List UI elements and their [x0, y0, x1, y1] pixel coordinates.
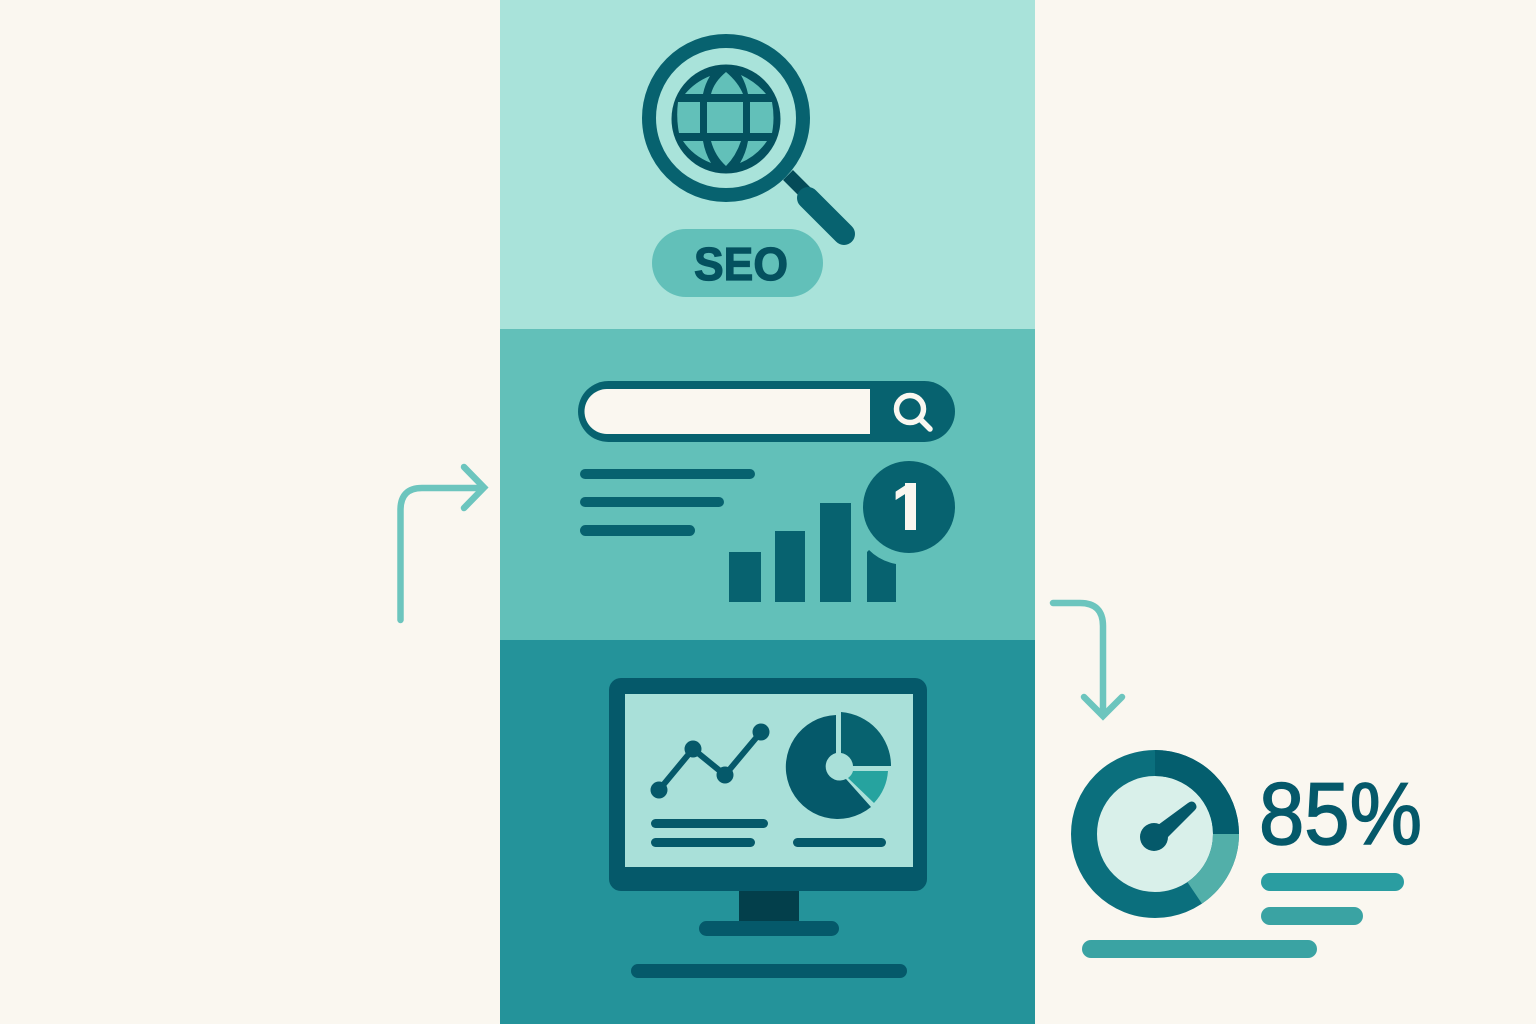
bar chart — [729, 503, 896, 602]
gauge needle — [1140, 802, 1196, 851]
line chart — [650, 724, 770, 798]
panel: analytics — [500, 640, 1035, 1024]
icon: search — [896, 396, 930, 429]
pie chart — [786, 712, 891, 819]
stat: 85%: 85% — [1259, 764, 1422, 863]
panel: SEO — [500, 0, 1035, 329]
screen text lines — [651, 819, 886, 847]
badge: SEO: SEO — [694, 238, 788, 290]
icon: magnifying glass with globe — [649, 41, 844, 234]
arrow: into search panel — [400, 467, 484, 620]
panel: search ranking — [500, 329, 1035, 640]
badge: rank 1: 1 — [892, 470, 928, 544]
badge: SEO — [652, 229, 823, 297]
gauge — [1084, 763, 1226, 905]
caption line — [631, 964, 907, 978]
result text lines — [580, 469, 755, 536]
stat caption lines — [1082, 873, 1404, 958]
search bar — [578, 381, 955, 442]
arrow: down to gauge — [1053, 603, 1122, 716]
infographic canvas — [397, 0, 1420, 1024]
icon: monitor — [609, 678, 927, 936]
icon: globe — [672, 64, 780, 174]
badge: rank 1 — [863, 461, 955, 553]
